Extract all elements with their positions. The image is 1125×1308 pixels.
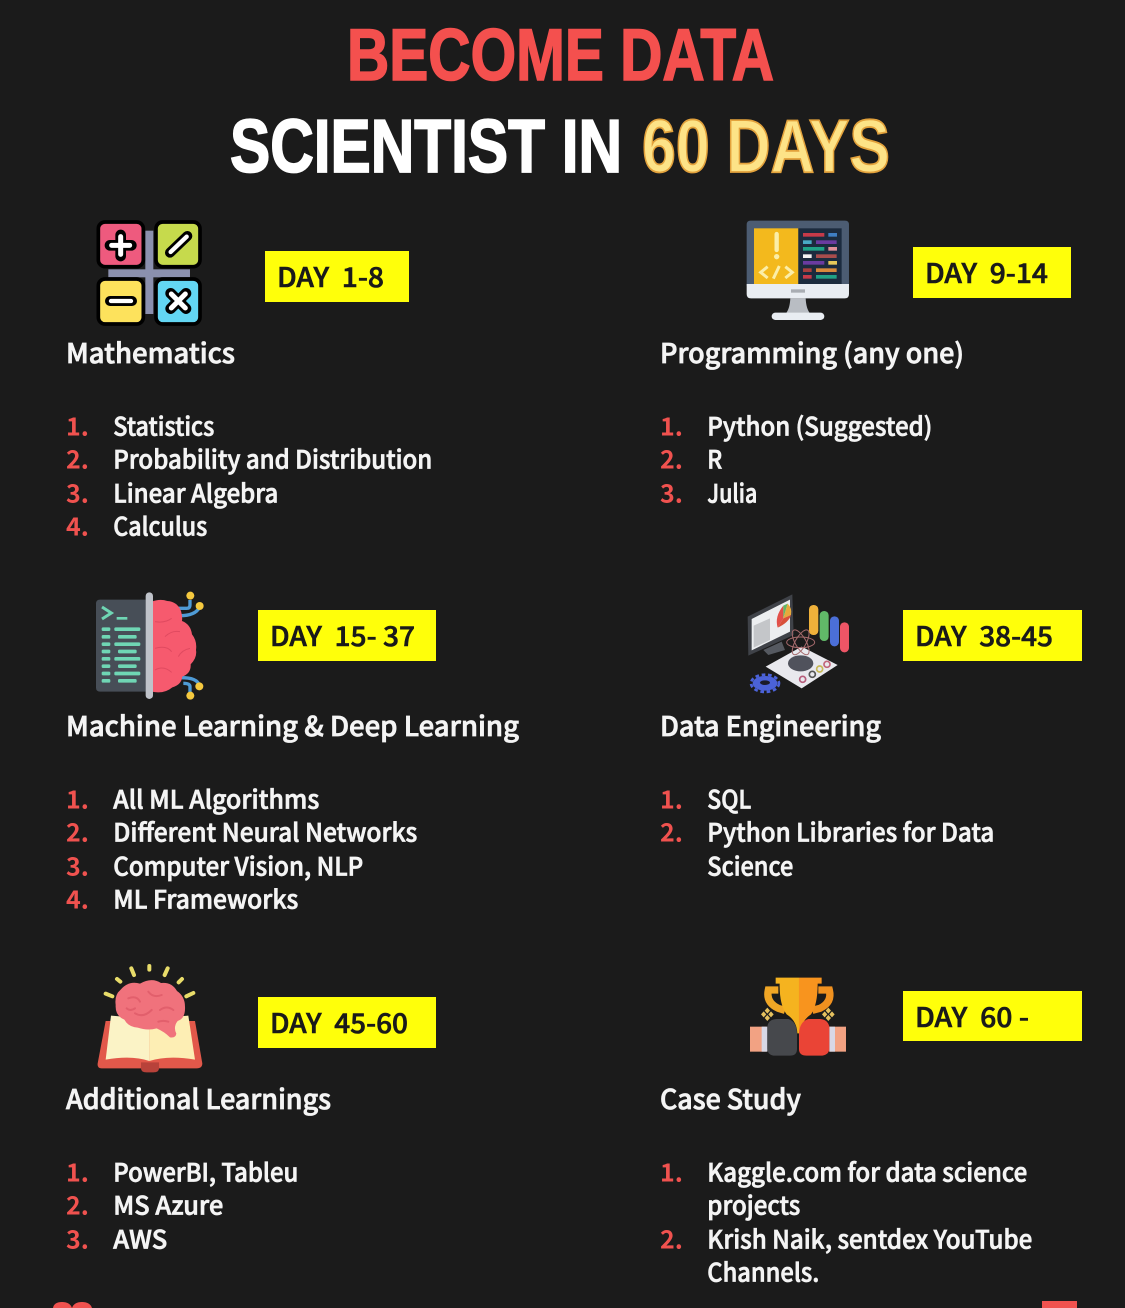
list [66, 407, 432, 543]
list: projects [707, 1186, 800, 1222]
day badge: DAY 15- 37 [270, 615, 415, 654]
title [230, 15, 890, 188]
list: Channels. [707, 1253, 819, 1289]
panel: machine learning [66, 592, 519, 916]
list: 2. [660, 1220, 683, 1256]
list: 2. [660, 813, 683, 849]
list: ML Frameworks [113, 880, 298, 916]
list: 2. [66, 813, 89, 849]
heading: Data Engineering [660, 705, 881, 744]
day badge: DAY 1-8 [277, 256, 384, 295]
list: R [707, 440, 722, 476]
day badge [913, 247, 1071, 298]
list [660, 407, 932, 510]
title: 60 DAYS [642, 104, 890, 188]
list: Kaggle.com for data science [707, 1153, 1027, 1189]
list: Statistics [113, 407, 214, 443]
day badge [903, 610, 1082, 661]
list: 3. [660, 474, 683, 510]
day badge [265, 251, 409, 302]
panel: case study [660, 978, 1082, 1289]
list: 1. [660, 407, 683, 443]
day badge: DAY 45-60 [270, 1002, 408, 1041]
day badge [258, 610, 436, 661]
list [66, 780, 417, 916]
icon: book and brain [98, 966, 202, 1072]
list: 1. [66, 1153, 89, 1189]
list [66, 1153, 298, 1256]
icon: math operators [98, 222, 200, 324]
list: 4. [66, 880, 89, 916]
list: 1. [66, 780, 89, 816]
day badge: DAY 60 - [915, 996, 1029, 1035]
list: Linear Algebra [113, 474, 278, 510]
list: Probability and Distribution [113, 440, 432, 476]
heading: Machine Learning & Deep Learning [66, 705, 519, 744]
list: 2. [660, 440, 683, 476]
day badge: DAY 9-14 [925, 252, 1048, 291]
heading: Case Study [660, 1078, 801, 1117]
list: 1. [660, 1153, 683, 1189]
list: 1. [660, 780, 683, 816]
title: BECOME DATA [347, 15, 774, 96]
list: Different Neural Networks [113, 813, 417, 849]
list: 3. [66, 847, 89, 883]
list: AWS [113, 1220, 167, 1256]
heading: Programming (any one) [660, 332, 964, 371]
list: All ML Algorithms [113, 780, 319, 816]
list: PowerBI, Tableu [113, 1153, 298, 1189]
panel: data engineering [660, 594, 1082, 883]
list: Python Libraries for Data [707, 813, 994, 849]
list: 2. [66, 1186, 89, 1222]
icon: data workstation [748, 594, 849, 692]
list: Calculus [113, 507, 207, 543]
list: MS Azure [113, 1186, 223, 1222]
list [660, 1153, 1032, 1289]
panel: programming [660, 221, 1071, 510]
list: SQL [707, 780, 751, 816]
heading: Mathematics [66, 332, 235, 371]
list: Science [707, 847, 793, 883]
list [660, 780, 994, 883]
heading: Additional Learnings [66, 1078, 331, 1117]
list: 1. [66, 407, 89, 443]
panel: additional learnings [66, 966, 436, 1256]
day badge [903, 991, 1082, 1041]
list: 3. [66, 1220, 89, 1256]
day badge: DAY 38-45 [915, 615, 1053, 654]
icon: cropped red square at bottom right [1042, 1301, 1077, 1308]
list: 3. [66, 474, 89, 510]
panel: mathematics [66, 222, 432, 543]
list: Krish Naik, sentdex YouTube [707, 1220, 1032, 1256]
list: Julia [707, 474, 757, 510]
icon: code monitor [747, 221, 849, 320]
day badge [258, 997, 436, 1048]
list: Computer Vision, NLP [113, 847, 363, 883]
list: 4. [66, 507, 89, 543]
list: 2. [66, 440, 89, 476]
icon: trophy and boxing gloves [750, 978, 846, 1056]
title: SCIENTIST IN [230, 104, 622, 188]
list: Python (Suggested) [707, 407, 932, 443]
icon: code and brain [96, 592, 204, 700]
icon: cropped heart at bottom left [53, 1302, 92, 1308]
